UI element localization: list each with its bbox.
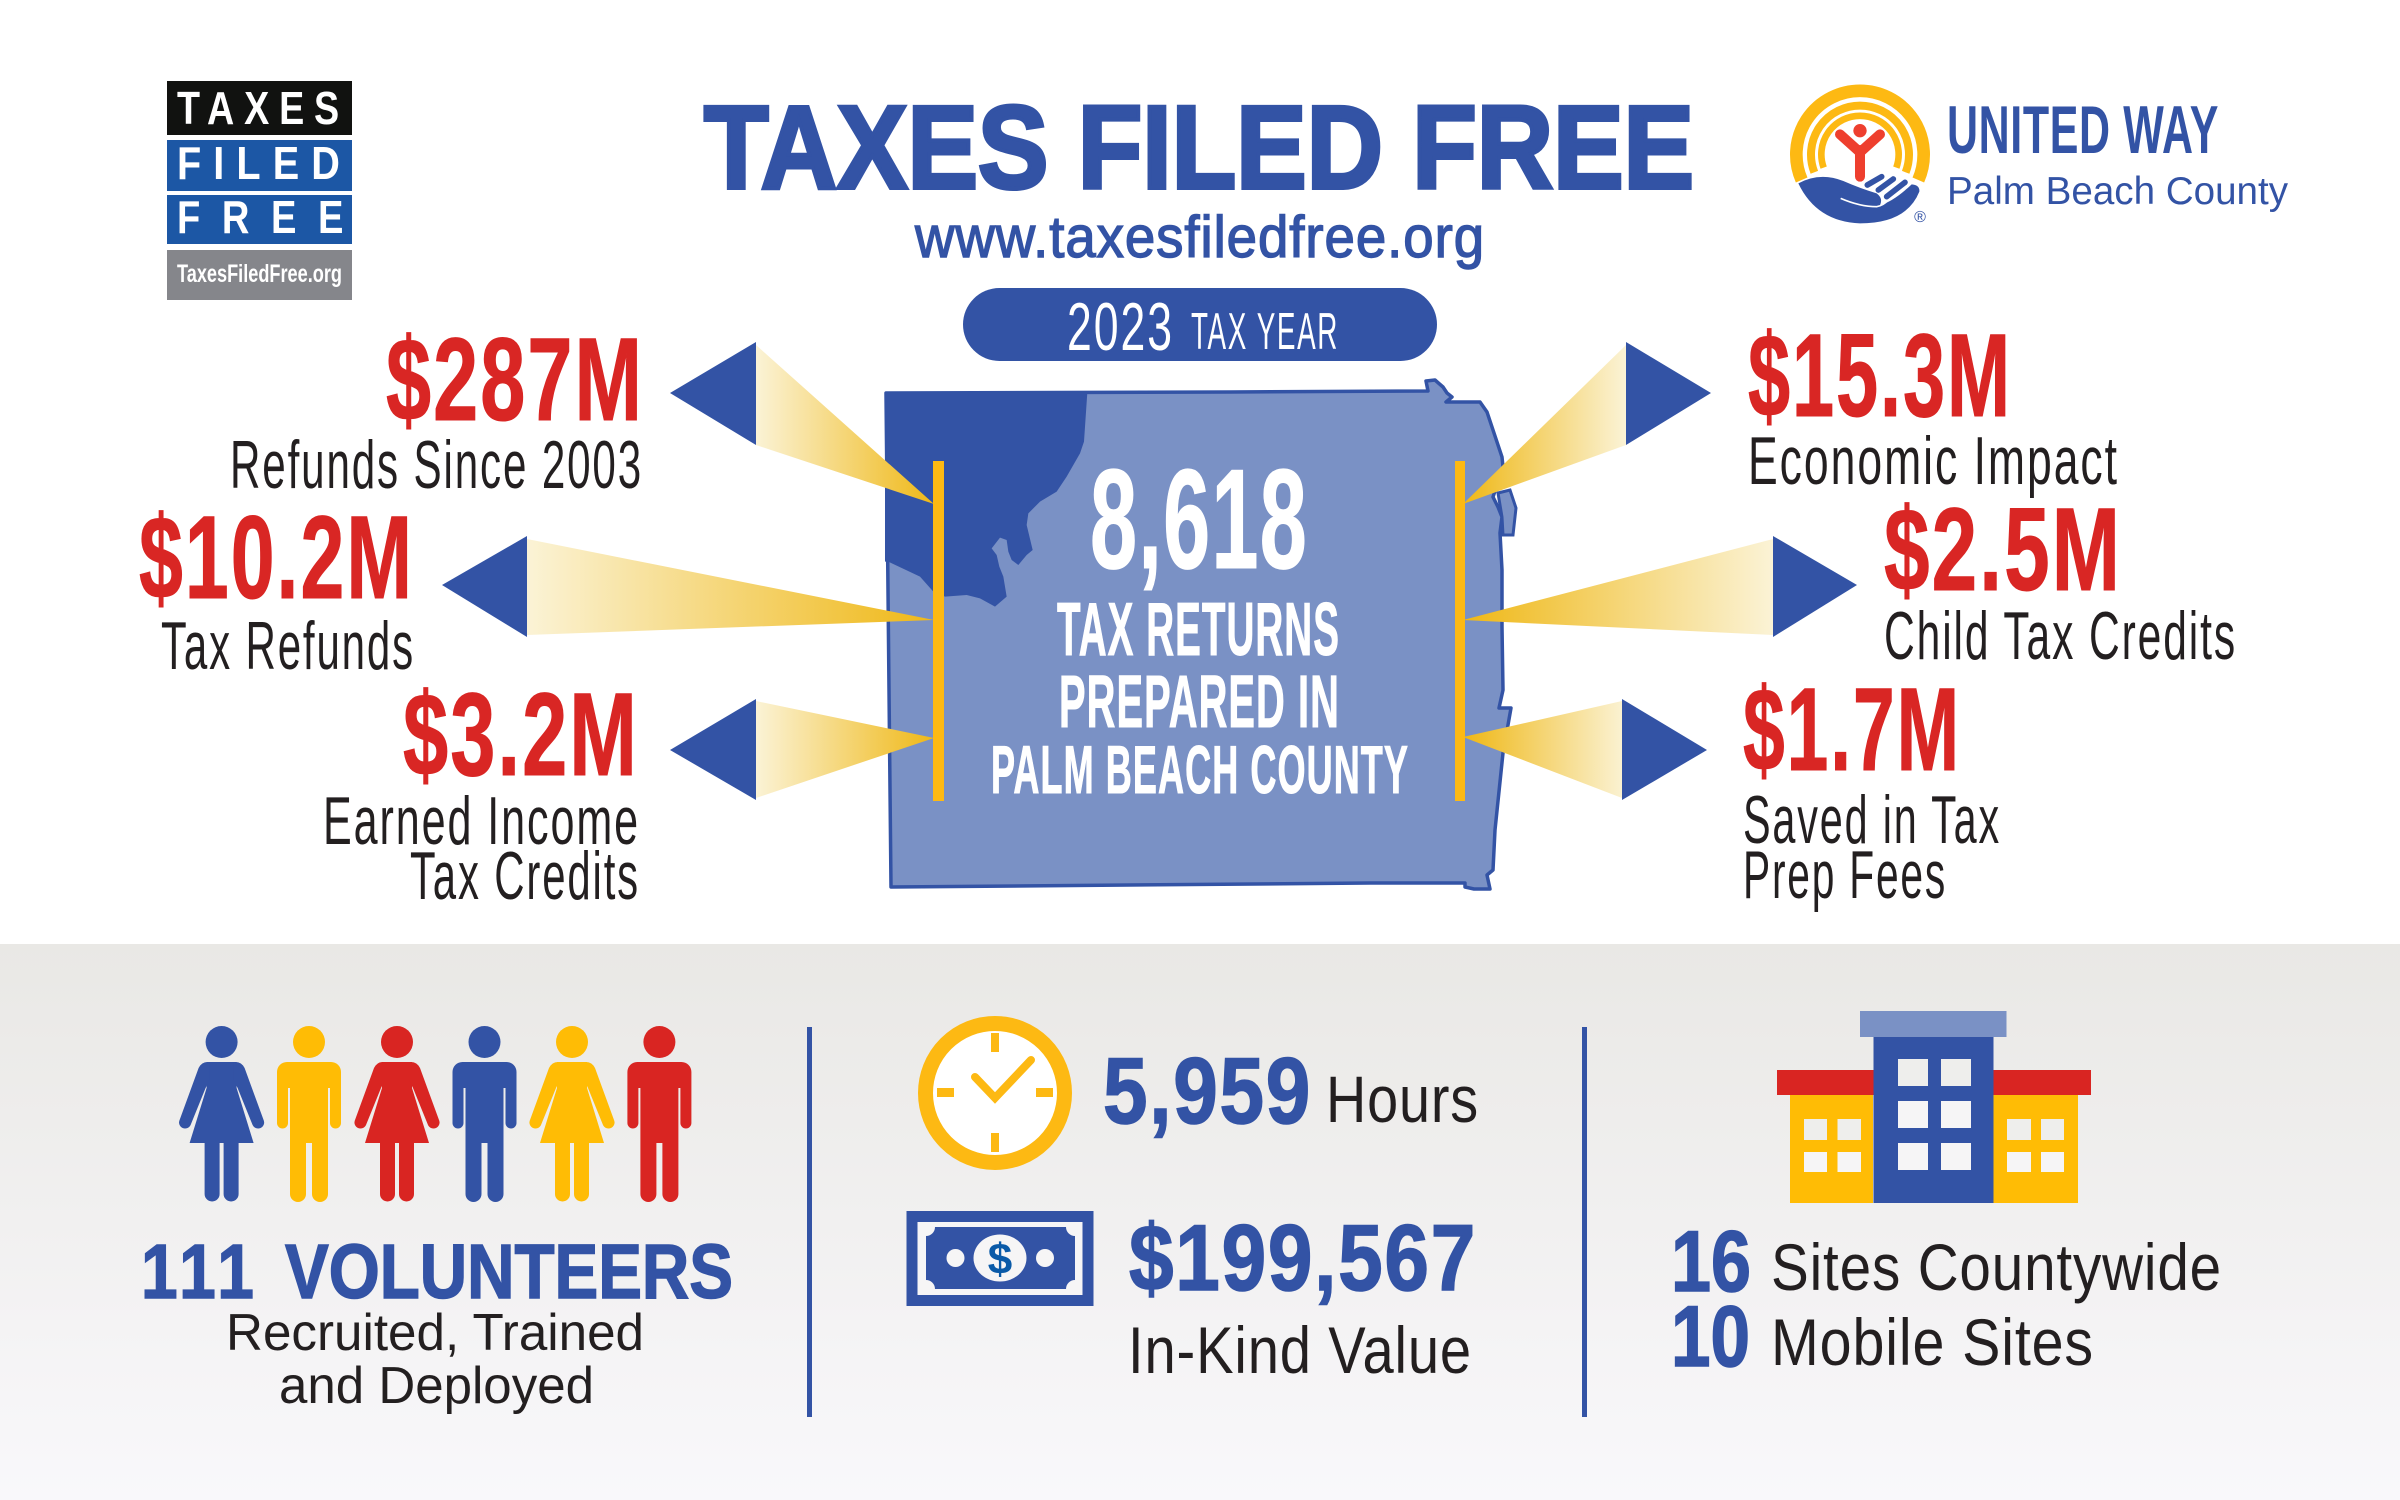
stat: $3.2M earned income tax credits: $3.2M [403, 669, 639, 801]
stat: $199,567 in-kind value: $199,567 [1129, 1205, 1477, 1310]
stat: $3.2M earned income tax credits: Tax Credits [410, 838, 640, 914]
tax year pill: 2023 [1067, 289, 1174, 365]
stat: 10 mobile sites: Mobile Sites [1771, 1305, 2094, 1379]
icon: dollar bill: $ [988, 1235, 1012, 1284]
arrow: saved in tax prep fees [1622, 699, 1707, 800]
map headline: 8,618 tax returns: PREPARED IN [1059, 660, 1340, 743]
left gold bar [933, 461, 944, 801]
stat: $1.7M saved in tax prep fees: Prep Fees [1743, 837, 1947, 913]
logo: United Way Palm Beach County: UNITED WAY [1947, 92, 2219, 168]
logo: Taxes Filed Free: TaxesFiledFree.org [177, 260, 342, 288]
map headline: 8,618 tax returns: PALM BEACH COUNTY [991, 732, 1409, 808]
stat: 16 sites countywide: Sites Countywide [1771, 1230, 2222, 1304]
volunteers description: Recruited, Trained [226, 1304, 644, 1362]
stat: $2.5M child tax credits: $2.5M [1884, 484, 2122, 616]
stat: $1.7M saved in tax prep fees: Saved in Tax [1743, 782, 2001, 858]
logo: United Way Palm Beach County [1796, 91, 2288, 226]
icon: dollar bill [912, 1216, 1088, 1300]
logo: Taxes Filed Free: TAXES [177, 82, 349, 134]
icon: buildings [1777, 1011, 2091, 1203]
stat: $1.7M saved in tax prep fees: $1.7M [1743, 664, 1961, 796]
arrow: tax refunds [442, 536, 527, 637]
arrow: child tax credits [1773, 536, 1857, 637]
map headline: 8,618 tax returns: 8,618 [1090, 440, 1308, 599]
stat: 10 mobile sites: 10 [1671, 1289, 1750, 1385]
arrow: refunds since 2003 [670, 342, 756, 445]
stat: 16 sites countywide: 16 [1671, 1214, 1751, 1310]
stat: $15.3M economic impact [1748, 310, 2119, 499]
divider right [1582, 1027, 1587, 1417]
arrow: economic impact [1626, 342, 1711, 445]
stat: $199,567 in-kind value [1128, 1205, 1477, 1387]
stat: 16 sites countywide [1671, 1214, 2222, 1310]
volunteers description [226, 1304, 644, 1415]
tax year pill: TAX YEAR [1191, 303, 1339, 361]
icon: six volunteer figures [179, 1026, 691, 1202]
stat: 5,959 hours: Hours [1326, 1062, 1479, 1136]
volunteers count: 111 [141, 1229, 259, 1315]
volunteers description: and Deployed [279, 1357, 594, 1415]
arrow: earned income tax credits [670, 699, 756, 800]
county map [885, 380, 1516, 889]
stat: $3.2M earned income tax credits [323, 669, 640, 914]
bottom band background [0, 944, 2400, 1500]
divider left [807, 1027, 812, 1417]
stat: $287M refunds since 2003: Refunds Since 2003 [230, 427, 643, 503]
stat: $10.2M tax refunds: $10.2M [139, 492, 414, 624]
stat: $287M refunds since 2003: $287M [386, 314, 644, 446]
stat: $199,567 in-kind value: In-Kind Value [1128, 1313, 1472, 1387]
stat: 5,959 hours [1103, 1038, 1479, 1143]
stat: 5,959 hours: 5,959 [1103, 1038, 1312, 1143]
logo: Taxes Filed Free [167, 81, 365, 300]
map headline: 8,618 tax returns: TAX RETURNS [1057, 587, 1340, 671]
left light beams [527, 345, 934, 798]
stat: $2.5M child tax credits [1884, 484, 2237, 674]
logo: Taxes Filed Free: FREE [177, 191, 365, 243]
logo: United Way Palm Beach County: Palm Beach County [1947, 170, 2288, 213]
stat: $15.3M economic impact: Economic Impact [1748, 423, 2119, 499]
map headline: 8,618 tax returns [991, 440, 1409, 808]
stat: $10.2M tax refunds [139, 492, 415, 684]
stat: $15.3M economic impact: $15.3M [1748, 310, 2012, 442]
stat: $10.2M tax refunds: Tax Refunds [161, 608, 415, 684]
icon: clock [926, 1024, 1064, 1162]
volunteers count: VOLUNTEERS [285, 1229, 733, 1315]
right gold bar [1455, 461, 1465, 801]
stat: 10 mobile sites [1671, 1289, 2094, 1385]
tax year pill [963, 288, 1437, 365]
right light beams [1463, 345, 1773, 798]
stat: $1.7M saved in tax prep fees [1743, 664, 2001, 913]
title: TAXES FILED FREE [704, 82, 1694, 214]
stat: $3.2M earned income tax credits: Earned Income [323, 783, 640, 859]
stat: $287M refunds since 2003 [230, 314, 644, 503]
logo: United Way Palm Beach County: ® [1914, 209, 1926, 226]
logo: Taxes Filed Free: FILED [177, 137, 352, 189]
volunteers count [141, 1229, 733, 1315]
website url: www.taxesfiledfree.org [914, 205, 1485, 270]
